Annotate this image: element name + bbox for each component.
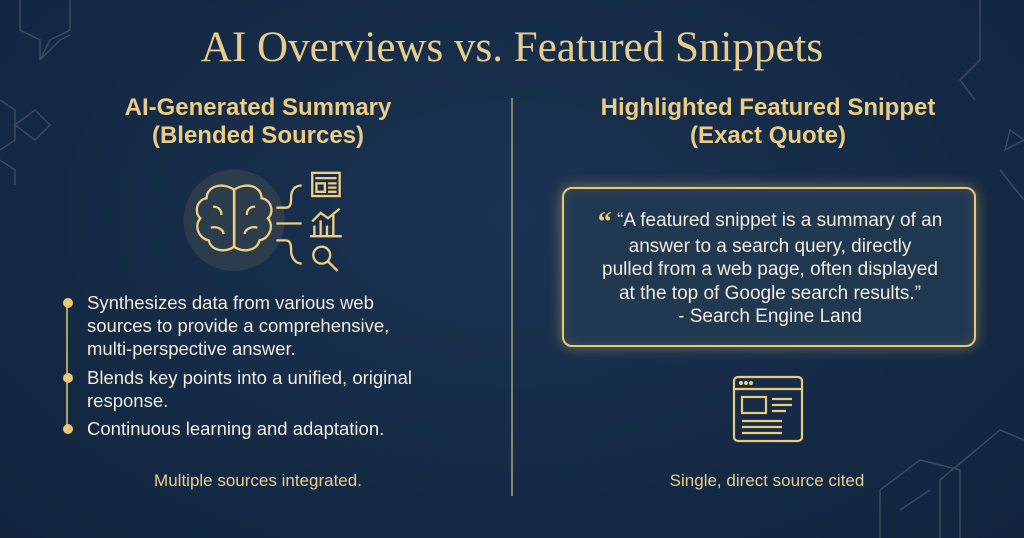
heading: AI-Generated Summary: [125, 94, 392, 149]
bullet 2: Blends key points into a unified, original response.: [87, 367, 412, 411]
icon: brain with sources: [184, 170, 342, 272]
bullet 3: Continuous learning and adaptation.: [87, 418, 384, 439]
caption left: Multiple sources integrated.: [154, 471, 362, 490]
heading: AI-Generated Summary: (Blended Sources): [152, 122, 364, 149]
quote box: [562, 187, 976, 347]
quote text: [598, 207, 942, 327]
bullet 1: Synthesizes data from various web sources to provide a comprehensive, multi-perspective answer.: [87, 292, 389, 359]
heading: Highlighted Featured Snippet: Highlighted Featured Snippet: [601, 94, 935, 121]
caption right: Single, direct source cited: [670, 471, 864, 490]
quote text: pulled from a web page, often displayed: [602, 259, 938, 280]
divider: [511, 98, 513, 496]
quote text: answer to a search query, directly: [629, 236, 911, 256]
heading: Highlighted Featured Snippet: (Exact Quote): [690, 122, 846, 149]
heading: Highlighted Featured Snippet: [601, 94, 936, 149]
title: AI Overviews vs. Featured Snippets: [201, 24, 823, 71]
icon: web page: [732, 376, 804, 442]
panel: right: [553, 94, 985, 490]
heading: AI-Generated Summary: AI-Generated Summary: [125, 94, 391, 121]
quote text: - Search Engine Land: [678, 306, 862, 327]
quote text: at the top of Google search results.”: [619, 282, 921, 304]
quote text: “ “A featured snippet is a summary of an: [598, 207, 942, 238]
panel: left: [63, 94, 412, 490]
bullet list: [63, 292, 412, 439]
